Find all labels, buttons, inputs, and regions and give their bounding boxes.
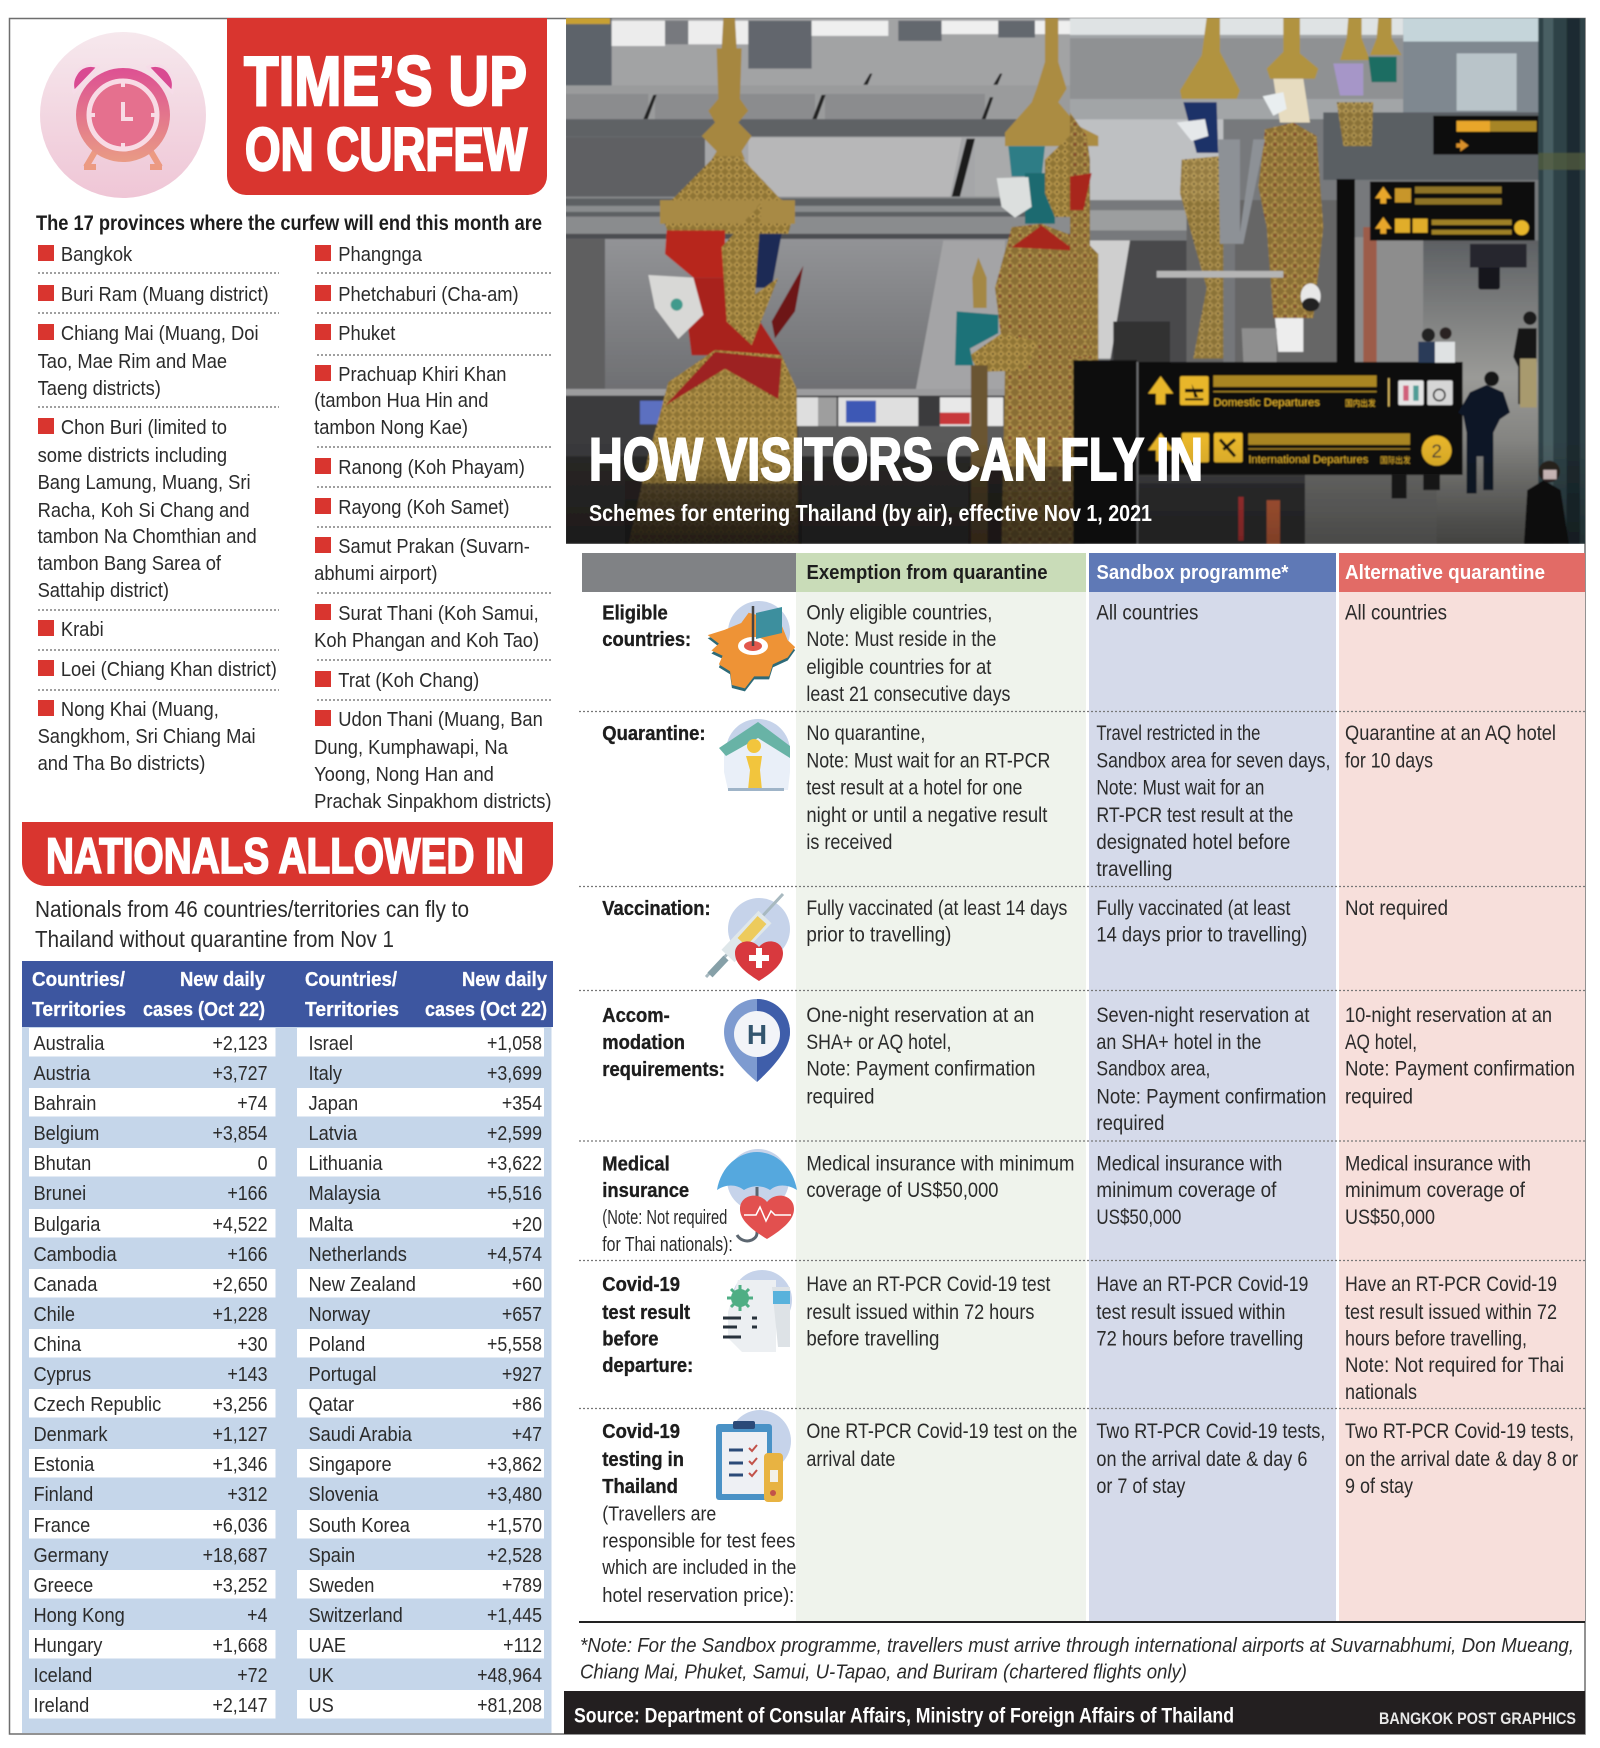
column text: exemption from quarantine: Note: Payment confirmation — [806, 1058, 1035, 1080]
table: new daily cases — [22, 961, 553, 1733]
province list column 1: Krabi — [61, 618, 104, 641]
province list column 1: Taeng districts) — [38, 377, 161, 400]
country names column 1: Iceland — [34, 1664, 92, 1687]
upper signs — [1370, 116, 1538, 241]
footnote — [580, 1634, 1574, 1684]
country names column 1: Canada — [34, 1273, 98, 1296]
heading: how visitors can fly in — [589, 426, 1203, 526]
icon: alarm clock — [40, 32, 206, 198]
province list column 1: some districts including — [38, 444, 227, 467]
column text: sandbox programme: Travel restricted in the — [1096, 722, 1260, 745]
column text: sandbox programme: Note: Must wait for an — [1096, 776, 1264, 800]
column text: alternative quarantine: test result issued within 72 — [1345, 1301, 1557, 1324]
country names column 1: Hong Kong — [34, 1604, 125, 1627]
country names column 2: Malaysia — [308, 1182, 381, 1205]
country names column 1: Ireland — [34, 1694, 89, 1717]
column text: exemption from quarantine: No quarantine, — [806, 722, 925, 745]
case numbers column 1: +72 — [237, 1665, 268, 1687]
country names column 2: US — [308, 1694, 334, 1717]
province list column 2: Phetchaburi (Cha-am) — [338, 283, 519, 306]
column text: sandbox programme: Note: Payment confirmation — [1096, 1086, 1326, 1108]
province list column 2: Trat (Koh Chang) — [338, 669, 479, 692]
case numbers column 2: +354 — [502, 1093, 542, 1115]
column text: exemption from quarantine: One RT-PCR Covid-19 test on the — [806, 1420, 1077, 1443]
case numbers column 1: +166 — [227, 1183, 268, 1205]
case numbers column 2 — [477, 1033, 542, 1717]
column text: sandbox programme: All countries — [1096, 602, 1198, 624]
row labels: Vaccination: — [602, 898, 711, 920]
table header: Territories — [305, 999, 399, 1021]
column text: alternative quarantine: Medical insurance with — [1345, 1152, 1531, 1176]
case numbers column 2: +112 — [503, 1635, 542, 1657]
column headers: Sandbox programme* — [1096, 562, 1289, 584]
column text: sandbox programme: Medical insurance with — [1096, 1152, 1282, 1176]
country names column 1: France — [34, 1514, 90, 1537]
province list column 2: Udon Thani (Muang, Ban — [338, 708, 543, 731]
column text: alternative quarantine: Have an RT-PCR Covid-19 — [1345, 1273, 1557, 1296]
country names column 2: Netherlands — [308, 1243, 407, 1266]
province list column 1: tambon Na Chomthian and — [38, 525, 257, 548]
column text: sandbox programme: Two RT-PCR Covid-19 tests, — [1096, 1420, 1325, 1443]
column text: alternative quarantine: All countries — [1345, 602, 1447, 624]
column text: sandbox programme: Sandbox area, — [1096, 1058, 1210, 1080]
heading: provinces: The 17 provinces where the curfew will end this month are — [36, 212, 542, 235]
main sign: 2 — [1431, 440, 1442, 461]
column text: sandbox programme: Sandbox area for seven days, — [1096, 750, 1330, 772]
icon: quarantine house — [719, 719, 790, 791]
column text: alternative quarantine: required — [1345, 1086, 1413, 1108]
country names column 2: New Zealand — [308, 1273, 416, 1296]
column text: exemption from quarantine: arrival date — [806, 1448, 895, 1471]
main sign: 国际出发 — [1380, 455, 1411, 465]
province list column 2: Rayong (Koh Samet) — [338, 496, 510, 519]
case numbers column 2: +5,558 — [487, 1334, 542, 1356]
photo: right half background — [1070, 18, 1587, 544]
country names column 1: Germany — [34, 1544, 109, 1567]
icon: vaccine syringe — [706, 894, 790, 981]
province list column 1: Bangkok — [61, 243, 132, 266]
row labels: Quarantine: — [602, 723, 705, 745]
column headers: Alternative quarantine — [1345, 562, 1545, 584]
column text: exemption from quarantine: before travelling — [806, 1328, 939, 1350]
country names column 1: Estonia — [34, 1453, 95, 1476]
column text: alternative quarantine: Note: Payment confirmation — [1345, 1058, 1575, 1080]
case numbers column 1: +3,252 — [212, 1575, 268, 1597]
column text: sandbox programme: an SHA+ hotel in the — [1096, 1031, 1261, 1054]
province list column 1 — [38, 243, 277, 775]
province list column 2: Prachuap Khiri Khan — [338, 363, 506, 386]
row label notes — [601, 1206, 796, 1607]
province list column 1: Chiang Mai (Muang, Doi — [61, 322, 259, 345]
travellers silhouettes — [1138, 244, 1569, 544]
table header: cases (Oct 22) — [425, 999, 547, 1021]
column text: alternative quarantine: 9 of stay — [1345, 1475, 1413, 1498]
province list column 2: Yoong, Nong Han and — [314, 763, 494, 786]
case numbers column 2: +657 — [502, 1304, 542, 1326]
country names column 1: Hungary — [34, 1634, 103, 1657]
country names column 2: Saudi Arabia — [308, 1423, 412, 1446]
row labels: before — [602, 1329, 659, 1351]
case numbers column 1 — [203, 1033, 268, 1717]
country names column 1: Denmark — [34, 1423, 108, 1446]
province list column 1: Loei (Chiang Khan district) — [61, 658, 277, 681]
row label notes: (Note: Not required — [602, 1206, 727, 1229]
case numbers column 2: +1,570 — [487, 1515, 542, 1537]
province list column 2: Prachak Sinpakhom districts) — [314, 790, 552, 813]
province list column 2: Samut Prakan (Suvarn- — [338, 535, 530, 558]
column text: exemption from quarantine: One-night reservation at an — [806, 1004, 1034, 1027]
case numbers column 1: +143 — [227, 1364, 268, 1386]
province list column 2 — [314, 243, 552, 813]
icon: clipboard and test kit — [716, 1410, 791, 1502]
case numbers column 1: +1,668 — [212, 1635, 268, 1657]
province list column 1: Sattahip district) — [38, 579, 169, 602]
province list column 2: tambon Nong Kae) — [314, 416, 468, 439]
icon: map target — [708, 601, 795, 691]
banner: nationals allowed in: NATIONALS ALLOWED IN — [46, 828, 524, 884]
country names column 1: Australia — [34, 1032, 105, 1055]
country names column 1: China — [34, 1333, 81, 1356]
case numbers column 2: +3,622 — [487, 1153, 542, 1175]
province list column 2: Surat Thani (Koh Samui, — [338, 602, 539, 625]
column text: sandbox programme: US$50,000 — [1096, 1206, 1181, 1229]
case numbers column 2: +1,058 — [487, 1033, 542, 1055]
panel: curfew — [36, 18, 553, 813]
country names column 2: South Korea — [308, 1514, 410, 1537]
case numbers column 2: +86 — [512, 1394, 542, 1416]
icon: medical insurance umbrella — [717, 1149, 797, 1241]
column text: exemption from quarantine: result issued within 72 hours — [806, 1301, 1034, 1324]
country names column 2: Latvia — [308, 1122, 357, 1145]
column text: sandbox programme — [1096, 602, 1330, 1498]
row label notes: which are included in the — [601, 1556, 796, 1579]
photo left half background — [565, 18, 1085, 544]
table header: cases (Oct 22) — [143, 999, 265, 1021]
province list column 1: and Tha Bo districts) — [38, 752, 205, 775]
column text: sandbox programme: 72 hours before travelling — [1096, 1328, 1303, 1350]
country names column 2: Japan — [308, 1092, 358, 1115]
column text: sandbox programme: minimum coverage of — [1096, 1179, 1277, 1202]
column text: exemption from quarantine: eligible countries for at — [806, 656, 992, 679]
bullets and dividers — [38, 245, 553, 726]
row labels: Covid-19 — [602, 1421, 680, 1443]
sign pillars — [1073, 179, 1355, 544]
case numbers column 1: +166 — [227, 1244, 268, 1266]
case numbers column 1: +3,256 — [212, 1394, 268, 1416]
country names column 1: Czech Republic — [34, 1393, 161, 1416]
country names column 1: Greece — [34, 1574, 93, 1597]
province list column 2: abhumi airport) — [314, 562, 437, 585]
country names column 1: Bhutan — [34, 1152, 91, 1175]
column text: exemption from quarantine: SHA+ or AQ hotel, — [806, 1031, 951, 1054]
case numbers column 2: +48,964 — [477, 1665, 542, 1687]
column text: sandbox programme: or 7 of stay — [1096, 1475, 1186, 1498]
case numbers column 2: +1,445 — [487, 1605, 542, 1627]
province list column 1: Racha, Koh Si Chang and — [38, 499, 250, 522]
column text: sandbox programme: 14 days prior to travelling) — [1096, 924, 1307, 946]
column text: alternative quarantine: US$50,000 — [1345, 1206, 1435, 1229]
case numbers column 1: +2,147 — [212, 1695, 268, 1717]
airport signs — [1073, 116, 1538, 544]
country names column 2: Norway — [308, 1303, 371, 1326]
column text: sandbox programme: RT-PCR test result at the — [1096, 804, 1293, 827]
table header: Territories — [32, 999, 126, 1021]
country names column 2: Italy — [308, 1062, 342, 1085]
row labels: Covid-19 — [602, 1274, 680, 1296]
heading: how visitors can fly in: HOW VISITORS CAN FLY IN — [589, 426, 1203, 493]
row labels: Medical — [602, 1154, 670, 1176]
country names column 1: Brunei — [34, 1182, 86, 1205]
column text: alternative quarantine — [1345, 602, 1578, 1498]
case numbers column 2: +3,480 — [487, 1484, 542, 1506]
province list column 1: Bang Lamung, Muang, Sri — [38, 471, 251, 494]
province list column 2: Ranong (Koh Phayam) — [338, 456, 525, 479]
column text: exemption from quarantine — [806, 602, 1077, 1471]
country names column 1: Bulgaria — [34, 1213, 101, 1236]
column headers: Exemption from quarantine — [806, 562, 1048, 584]
column text: exemption from quarantine: least 21 consecutive days — [806, 683, 1010, 706]
alternating white rows — [29, 1028, 544, 1718]
province list column 1: Tao, Mae Rim and Mae — [38, 350, 227, 373]
column text: exemption from quarantine: Fully vaccinated (at least 14 days — [806, 897, 1067, 920]
footnote: Chiang Mai, Phuket, Samui, U-Tapao, and Buriram (chartered flights only) — [580, 1660, 1187, 1684]
province list column 2: (tambon Hua Hin and — [314, 389, 488, 412]
column headers — [582, 553, 1585, 592]
case numbers column 2: +60 — [512, 1274, 542, 1296]
title banner: time's up on curfew: TIME’S UP — [244, 42, 527, 120]
province list column 1: Sangkhom, Sri Chiang Mai — [38, 725, 256, 748]
row labels: testing in — [602, 1449, 684, 1471]
column text: alternative quarantine: hours before travelling, — [1345, 1328, 1527, 1350]
row label notes: responsible for test fees — [602, 1530, 795, 1552]
heading: how visitors can fly in: Schemes for entering Thailand (by air), effective Nov 1, 2021 — [589, 500, 1152, 526]
case numbers column 1: +2,123 — [212, 1033, 268, 1055]
main sign: 国内出发 — [1345, 398, 1376, 408]
country names column 2: Poland — [308, 1333, 365, 1356]
row labels: requirements: — [602, 1059, 725, 1081]
row labels: departure: — [602, 1355, 693, 1377]
column text: sandbox programme: Have an RT-PCR Covid-19 — [1096, 1273, 1308, 1296]
case numbers column 1: +1,346 — [212, 1454, 268, 1476]
column text: exemption from quarantine: coverage of US$50,000 — [806, 1179, 998, 1202]
case numbers column 1: +74 — [237, 1093, 268, 1115]
main sign: Domestic Departures — [1213, 397, 1320, 409]
row labels: insurance — [602, 1180, 689, 1202]
row label notes: for Thai nationals): — [602, 1233, 733, 1256]
row labels: Thailand — [602, 1476, 678, 1498]
main sign — [1138, 362, 1463, 475]
column text: exemption from quarantine: Have an RT-PCR Covid-19 test — [806, 1273, 1051, 1296]
country names column 2: Slovenia — [308, 1483, 379, 1506]
country names column 2: Switzerland — [308, 1604, 403, 1627]
column text: alternative quarantine: Note: Not required for Thai — [1345, 1354, 1564, 1377]
case numbers column 1: 0 — [258, 1153, 268, 1175]
photo: airport statues and signs — [565, 18, 1587, 544]
column text: alternative quarantine: minimum coverage of — [1345, 1179, 1525, 1202]
country names column 2: Israel — [308, 1032, 353, 1055]
table header: Countries/ — [305, 969, 397, 991]
country names column 2: UK — [308, 1664, 334, 1687]
column text: exemption from quarantine: Only eligible countries, — [806, 602, 992, 624]
country names column 2: Lithuania — [308, 1152, 383, 1175]
case numbers column 1: +30 — [237, 1334, 268, 1356]
country names column 1: Belgium — [34, 1122, 99, 1145]
statues 2 to 6 background row — [1070, 18, 1402, 362]
statue 1 — [625, 18, 803, 544]
case numbers column 2: +2,528 — [487, 1545, 542, 1567]
country names column 2: Qatar — [308, 1393, 355, 1416]
case numbers column 1: +3,854 — [212, 1123, 268, 1145]
case numbers column 2: +3,862 — [487, 1454, 542, 1476]
source bar: Source: Department of Consular Affairs, Ministry of Foreign Affairs of Thailand — [574, 1704, 1234, 1728]
table header: Countries/ — [32, 969, 125, 991]
panel: schemes comparison table — [564, 553, 1585, 1734]
case numbers column 2: +81,208 — [477, 1695, 542, 1717]
row labels: Accom- — [602, 1005, 670, 1027]
case numbers column 1: +1,127 — [212, 1424, 268, 1446]
province list column 1: Nong Khai (Muang, — [61, 698, 219, 721]
title banner: time's up on curfew: ON CURFEW — [245, 116, 527, 183]
column text: exemption from quarantine: is received — [806, 831, 892, 854]
country names column 1: Bahrain — [34, 1092, 96, 1115]
country names column 2: Malta — [308, 1213, 353, 1236]
statue 2 — [955, 18, 1102, 544]
province list column 2: Phuket — [338, 322, 396, 345]
column backgrounds — [796, 592, 1585, 1621]
case numbers column 1: +4,522 — [212, 1214, 268, 1236]
column text: sandbox programme: on the arrival date & day 6 — [1096, 1448, 1307, 1471]
title banner: time's up on curfew — [227, 18, 547, 195]
province list column 2: Phangnga — [338, 243, 422, 266]
country names column 2 — [308, 1032, 416, 1717]
table header: New daily — [180, 969, 266, 991]
country names column 2: Portugal — [308, 1363, 376, 1386]
column text: exemption from quarantine: required — [806, 1086, 874, 1108]
case numbers column 2: +4,574 — [487, 1244, 542, 1266]
country names column 1: Chile — [34, 1303, 75, 1326]
column text: exemption from quarantine: night or until a negative result — [806, 804, 1048, 827]
case numbers column 1: +1,228 — [212, 1304, 268, 1326]
intro text — [35, 896, 469, 952]
column text: exemption from quarantine: Medical insurance with minimum — [806, 1152, 1074, 1176]
row labels: Eligible — [602, 603, 668, 625]
case numbers column 2: +927 — [502, 1364, 542, 1386]
column text: alternative quarantine: Not required — [1345, 897, 1448, 920]
case numbers column 2: +789 — [502, 1575, 542, 1597]
case numbers column 1: +18,687 — [203, 1545, 268, 1567]
case numbers column 2: +2,599 — [487, 1123, 542, 1145]
case numbers column 2: +47 — [512, 1424, 542, 1446]
case numbers column 2: +3,699 — [487, 1063, 542, 1085]
row labels: countries: — [602, 629, 691, 651]
case numbers column 1: +3,727 — [212, 1063, 268, 1085]
country names column 1: Finland — [34, 1483, 93, 1506]
country names column 1: Cyprus — [34, 1363, 91, 1386]
column text: exemption from quarantine: Note: Must wait for an RT-PCR — [806, 750, 1050, 772]
icon: hotel pin: H — [747, 1019, 767, 1050]
country names column 1: Austria — [34, 1062, 90, 1085]
table header: New daily — [462, 969, 548, 991]
province list column 1: tambon Bang Sarea of — [38, 552, 222, 575]
column text: exemption from quarantine: test result at a hotel for one — [806, 776, 1022, 800]
column text: alternative quarantine: AQ hotel, — [1345, 1031, 1417, 1054]
column text: alternative quarantine: for 10 days — [1345, 750, 1433, 772]
column text: exemption from quarantine: Note: Must reside in the — [806, 628, 996, 651]
case numbers column 2: +5,516 — [487, 1183, 542, 1205]
case numbers column 1: +312 — [227, 1484, 268, 1506]
country names column 1 — [34, 1032, 161, 1717]
row label notes: (Travellers are — [602, 1502, 716, 1526]
province list column 2: Koh Phangan and Koh Tao) — [314, 629, 539, 652]
intro text: Thailand without quarantine from Nov 1 — [35, 926, 394, 952]
country names column 2: Singapore — [308, 1453, 392, 1476]
case numbers column 1: +4 — [247, 1605, 268, 1627]
column text: alternative quarantine: nationals — [1345, 1381, 1417, 1404]
column text: exemption from quarantine: prior to travelling) — [806, 924, 951, 946]
column text: sandbox programme: Seven-night reservation at — [1096, 1004, 1310, 1027]
row labels — [602, 603, 725, 1498]
row labels: modation — [602, 1032, 685, 1054]
row label notes: hotel reservation price): — [602, 1584, 794, 1607]
country names column 1: Cambodia — [34, 1243, 117, 1266]
column text: sandbox programme: travelling — [1096, 858, 1172, 881]
column text: alternative quarantine: 10-night reservation at an — [1345, 1004, 1552, 1027]
column text: sandbox programme: Fully vaccinated (at least — [1096, 897, 1291, 920]
column text: sandbox programme: required — [1096, 1112, 1164, 1135]
icon: covid test result — [723, 1270, 792, 1352]
row labels: test result — [602, 1302, 691, 1324]
panel: nationals allowed in — [22, 822, 553, 1733]
country names column 2: Sweden — [308, 1574, 374, 1597]
case numbers column 1: +2,650 — [212, 1274, 268, 1296]
country names column 2: UAE — [308, 1634, 346, 1657]
main sign: International Departures — [1248, 454, 1368, 466]
country names column 2: Spain — [308, 1544, 355, 1567]
column text: alternative quarantine: Quarantine at an AQ hotel — [1345, 722, 1556, 745]
column text: sandbox programme: designated hotel before — [1096, 831, 1290, 854]
province list column 2: Dung, Kumphawapi, Na — [314, 736, 508, 759]
case numbers column 2: +20 — [512, 1214, 542, 1236]
case numbers column 1: +6,036 — [212, 1515, 268, 1537]
intro text: Nationals from 46 countries/territories can fly to — [35, 896, 469, 922]
source bar — [564, 1691, 1585, 1734]
province list column 1: Chon Buri (limited to — [61, 416, 227, 439]
province list column 1: Buri Ram (Muang district) — [61, 283, 269, 306]
column text: sandbox programme: test result issued within — [1096, 1301, 1285, 1324]
icon: hotel pin — [724, 999, 790, 1082]
table header — [22, 961, 553, 1027]
